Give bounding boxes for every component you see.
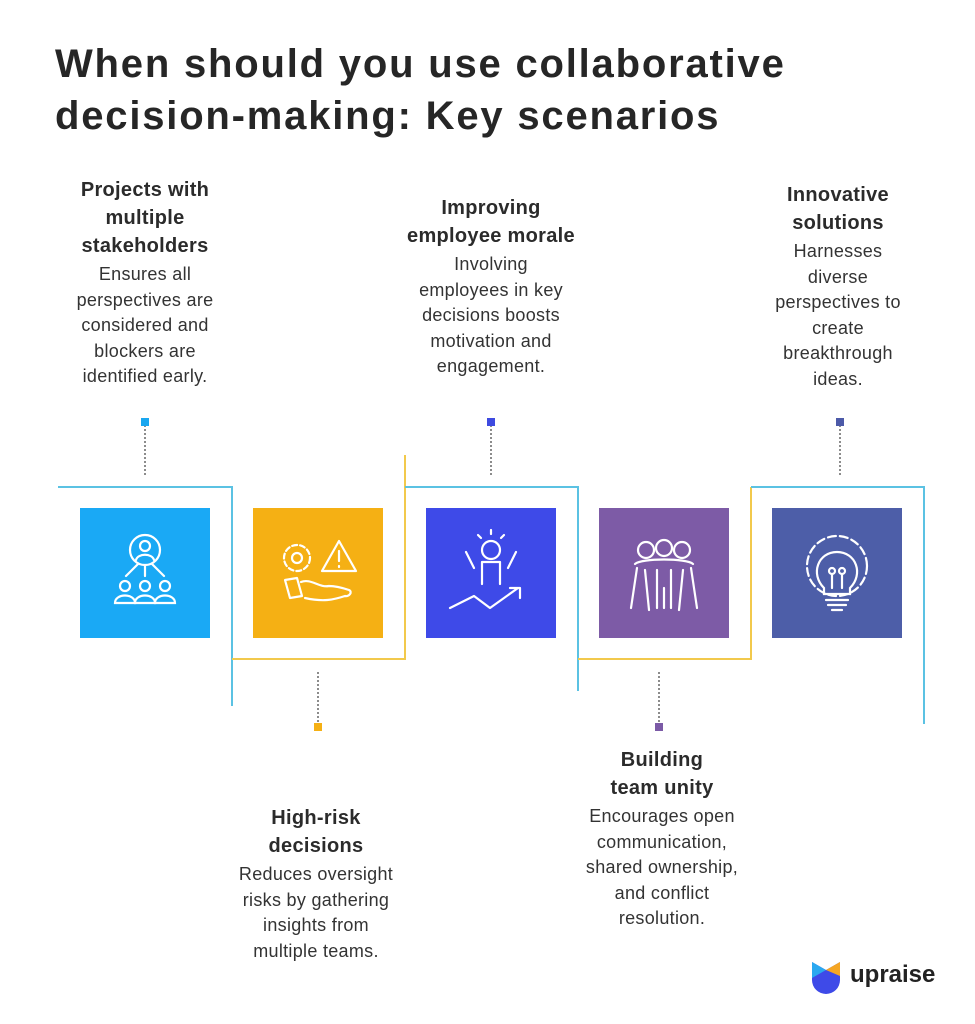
- text: improving employee morale: engagement.: [437, 356, 545, 376]
- text: innovative solutions: perspectives to: [775, 292, 901, 312]
- text: projects with multiple stakeholders: considered and: [81, 315, 209, 335]
- text: high-risk decisions: insights from: [263, 915, 369, 935]
- text: high-risk decisions: decisions: [269, 835, 363, 857]
- text: projects with multiple stakeholders: identified early.: [83, 366, 207, 386]
- icon box: innovation: [772, 508, 902, 638]
- text: building team unity: resolution.: [619, 908, 705, 928]
- text: building team unity: communication,: [597, 832, 727, 852]
- text: improving employee morale: employee morale: [407, 225, 575, 247]
- text: innovative solutions: Harnesses: [794, 241, 882, 261]
- text: innovative solutions: solutions: [792, 212, 884, 234]
- text: innovative solutions: breakthrough: [783, 343, 893, 363]
- text: projects with multiple stakeholders: blockers are: [94, 340, 196, 360]
- icon box: stakeholders: [80, 508, 210, 638]
- text: building team unity: Encourages open: [589, 806, 735, 826]
- text: building team unity: Building: [621, 749, 703, 771]
- text: improving employee morale: Involving: [454, 254, 528, 274]
- logo: upraise: upraise: [850, 961, 935, 988]
- text: innovative solutions: create: [812, 318, 864, 338]
- text: improving employee morale: motivation and: [430, 330, 552, 350]
- text: improving employee morale: decisions boosts: [422, 305, 560, 325]
- icon box: team unity: [599, 508, 729, 638]
- text: projects with multiple stakeholders: [77, 179, 213, 386]
- text: high-risk decisions: [239, 807, 393, 961]
- text: projects with multiple stakeholders: perspectives are: [77, 290, 213, 310]
- text: projects with multiple stakeholders: multiple: [105, 207, 185, 229]
- text: high-risk decisions: Reduces oversight: [239, 864, 393, 884]
- text: innovative solutions: diverse: [808, 266, 868, 286]
- icon box: risk: [253, 508, 383, 638]
- text: improving employee morale: employees in key: [419, 280, 563, 300]
- text: building team unity: [586, 749, 738, 928]
- text: high-risk decisions: risks by gathering: [243, 890, 389, 910]
- logo: upraise: [812, 961, 935, 994]
- title: When should you use collaborative: [55, 42, 786, 86]
- text: improving employee morale: Improving: [441, 197, 541, 219]
- text: innovative solutions: Innovative: [787, 184, 889, 206]
- text: innovative solutions: ideas.: [813, 368, 863, 388]
- text: high-risk decisions: multiple teams.: [253, 940, 379, 960]
- text: building team unity: and conflict: [615, 882, 709, 902]
- title: [55, 42, 786, 138]
- title: decision-making: Key scenarios: [55, 94, 720, 138]
- text: building team unity: shared ownership,: [586, 857, 738, 877]
- text: high-risk decisions: High-risk: [271, 807, 361, 829]
- text: building team unity: team unity: [610, 777, 714, 799]
- text: projects with multiple stakeholders: Ensures all: [99, 264, 191, 284]
- icon box: morale: [426, 508, 556, 638]
- text: projects with multiple stakeholders: stakeholders: [82, 235, 208, 257]
- text: improving employee morale: [407, 197, 575, 376]
- text: innovative solutions: [775, 184, 901, 388]
- text: projects with multiple stakeholders: Projects with: [81, 179, 209, 201]
